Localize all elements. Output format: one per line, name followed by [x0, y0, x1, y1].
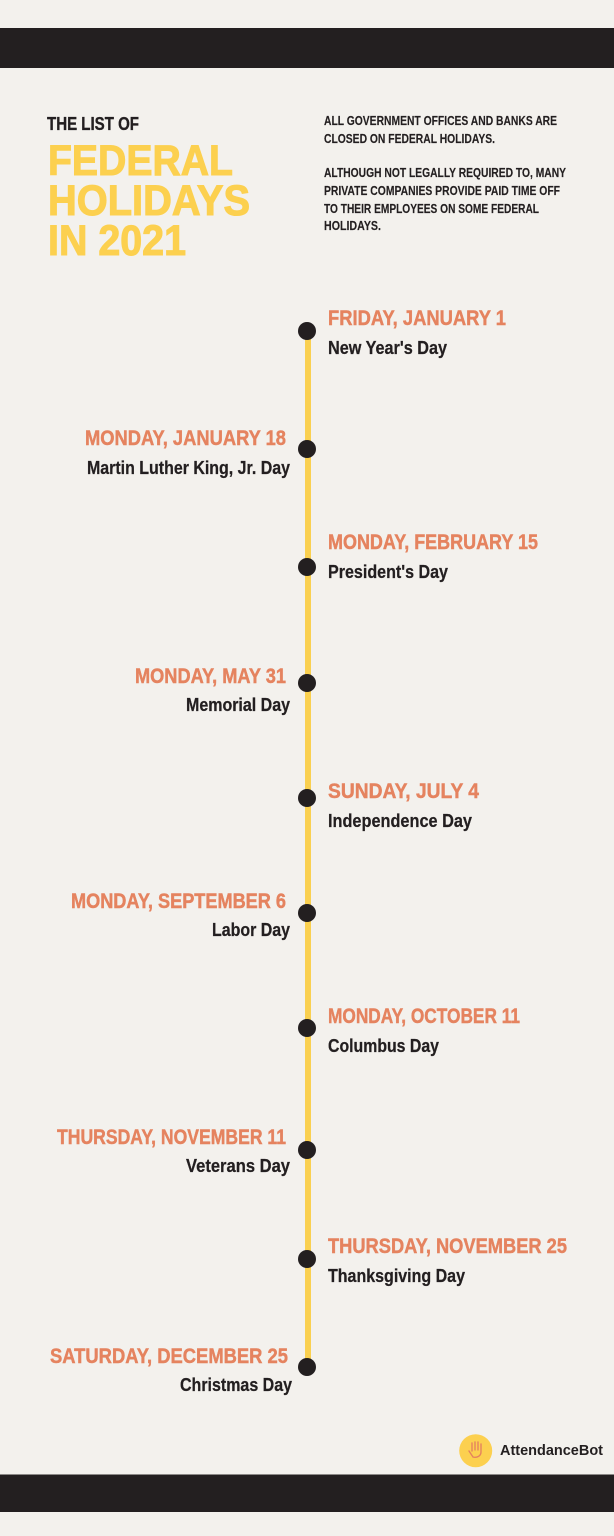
holiday: Christmas Day — [50, 1345, 293, 1395]
top bar — [0, 28, 614, 68]
holiday: New Year's Day: FRIDAY, JANUARY 1 — [328, 307, 506, 330]
timeline — [298, 322, 316, 1376]
title main: HOLIDAYS — [48, 177, 250, 225]
intro text: ALTHOUGH NOT LEGALLY REQUIRED TO, MANY — [324, 166, 567, 180]
holiday: Thanksgiving Day: THURSDAY, NOVEMBER 25 — [328, 1235, 567, 1258]
holiday: Martin Luther King Jr. Day: Martin Luther King, Jr. Day — [87, 457, 291, 478]
holiday: President's Day — [328, 531, 538, 582]
holiday: New Year's Day — [328, 307, 506, 358]
holiday: President's Day: President's Day — [328, 561, 449, 582]
title main: FEDERAL — [48, 137, 233, 185]
holiday: Labor Day: Labor Day — [212, 919, 291, 940]
holiday: Martin Luther King Jr. Day: MONDAY, JANUARY 18 — [85, 427, 286, 450]
timeline dots — [298, 322, 316, 1376]
holiday: Memorial Day: Memorial Day — [186, 694, 291, 715]
holiday: Independence Day — [328, 780, 479, 831]
title main: IN 2021 — [48, 217, 186, 265]
title kicker: THE LIST OF — [47, 114, 139, 134]
holiday: New Year's Day: New Year's Day — [328, 337, 448, 358]
holiday: Independence Day: SUNDAY, JULY 4 — [328, 780, 479, 803]
holiday: Memorial Day: MONDAY, MAY 31 — [135, 665, 286, 688]
holiday: Labor Day: MONDAY, SEPTEMBER 6 — [71, 890, 286, 913]
holiday: Columbus Day: MONDAY, OCTOBER 11 — [328, 1005, 520, 1028]
holiday: Labor Day — [71, 890, 291, 940]
intro text: ALL GOVERNMENT OFFICES AND BANKS ARE — [324, 114, 557, 128]
holiday: Memorial Day — [135, 665, 291, 715]
intro text: TO THEIR EMPLOYEES ON SOME FEDERAL — [324, 202, 539, 216]
holiday: Columbus Day — [328, 1005, 520, 1056]
intro text: CLOSED ON FEDERAL HOLIDAYS. — [324, 132, 495, 146]
holiday: Thanksgiving Day: Thanksgiving Day — [328, 1265, 466, 1286]
holiday: Independence Day: Independence Day — [328, 810, 473, 831]
holiday: Christmas Day: SATURDAY, DECEMBER 25 — [50, 1345, 288, 1368]
intro text: HOLIDAYS. — [324, 219, 381, 233]
holiday: Thanksgiving Day — [328, 1235, 567, 1286]
title — [47, 114, 250, 265]
holiday: Veterans Day: Veterans Day — [186, 1155, 291, 1176]
holiday: Veterans Day: THURSDAY, NOVEMBER 11 — [57, 1126, 286, 1149]
holiday: Veterans Day — [57, 1126, 291, 1176]
holiday: Martin Luther King Jr. Day — [85, 427, 291, 478]
holiday: Columbus Day: Columbus Day — [328, 1035, 440, 1056]
intro text — [324, 114, 567, 233]
icon: hand on yellow circle — [459, 1434, 492, 1467]
title main — [48, 137, 250, 265]
intro text: PRIVATE COMPANIES PROVIDE PAID TIME OFF — [324, 184, 560, 198]
bottom bar — [0, 1474, 614, 1512]
holiday: Christmas Day: Christmas Day — [180, 1374, 293, 1395]
logo wordmark: AttendanceBot — [500, 1443, 603, 1459]
holiday: President's Day: MONDAY, FEBRUARY 15 — [328, 531, 538, 554]
timeline line — [305, 331, 311, 1367]
AttendanceBot logo — [459, 1434, 603, 1467]
